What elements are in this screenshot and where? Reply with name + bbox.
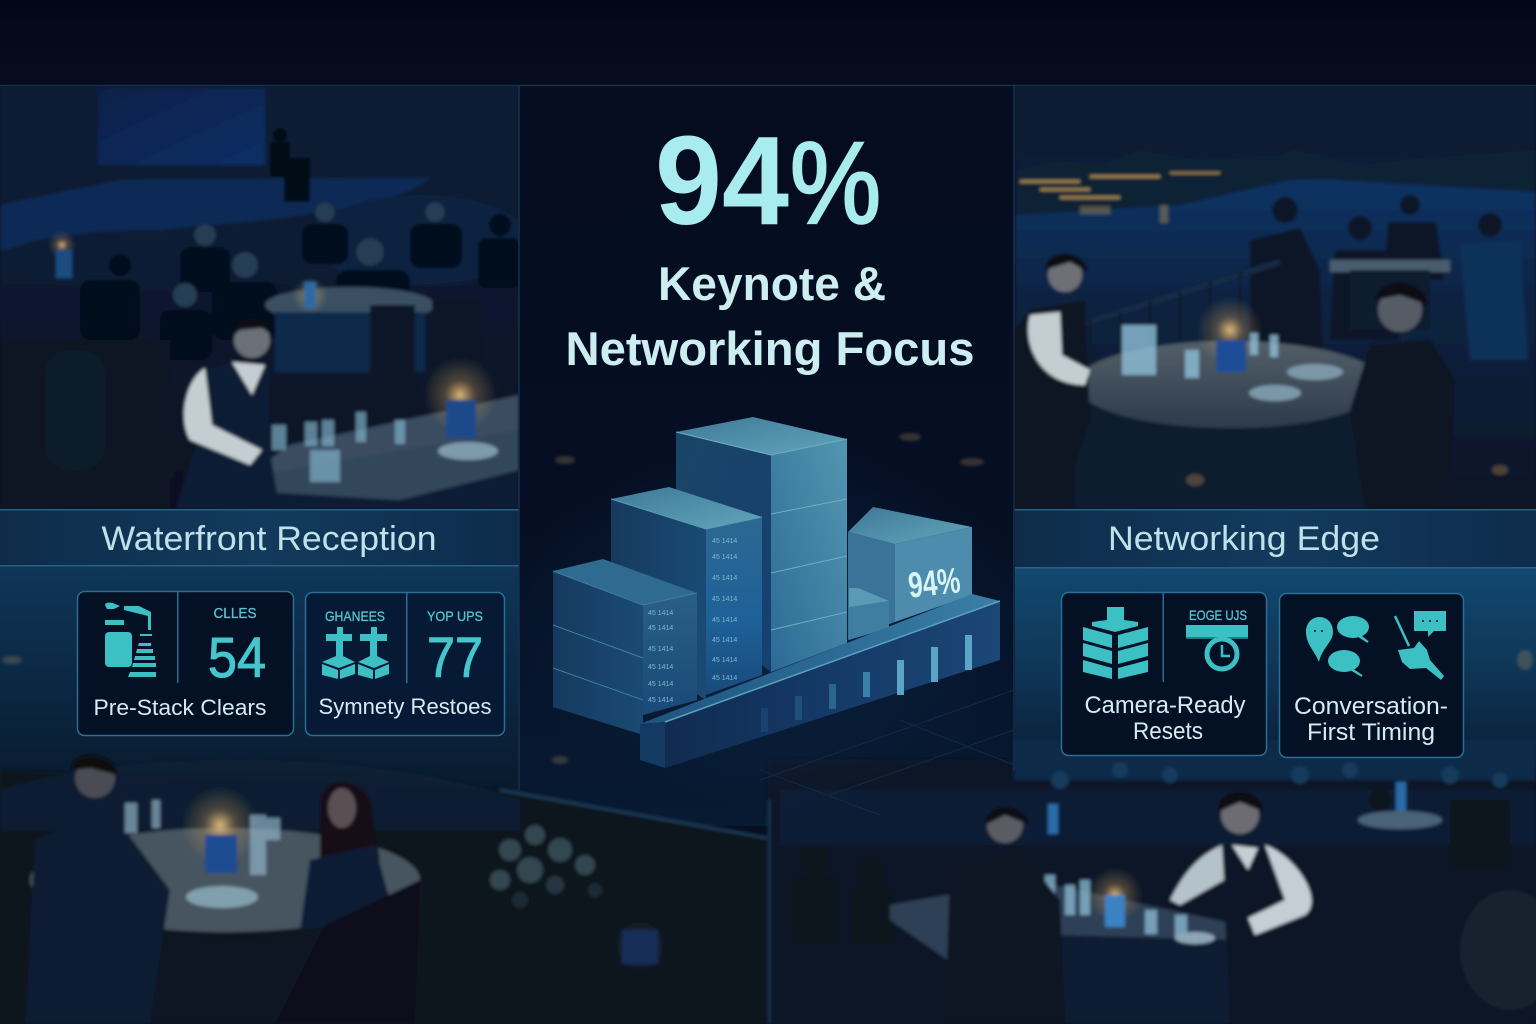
label: GHANEES: GHANEES — [325, 608, 385, 624]
woman — [300, 782, 395, 930]
value: 54: 54 — [208, 626, 266, 690]
panel: left lower band — [0, 566, 519, 791]
panel: left lower table scene — [0, 755, 768, 1024]
hero stat: 94%: 94 — [655, 110, 789, 251]
terrace rail — [500, 790, 768, 838]
caption: Symnety Restoes — [318, 694, 492, 719]
left block: 45 1414 — [648, 664, 673, 671]
right caption band — [1015, 509, 1536, 568]
middle block: 45 1414 — [712, 675, 737, 682]
railing — [1015, 262, 1280, 345]
city skyline — [1015, 150, 1536, 215]
right block — [848, 507, 972, 640]
left block: 45 1414 — [648, 646, 673, 653]
man — [25, 755, 170, 1024]
glass row — [1045, 875, 1242, 939]
left block: 45 1414 — [648, 625, 673, 632]
guest — [945, 807, 1065, 1024]
candle glow — [180, 785, 260, 865]
right chairs — [370, 305, 415, 395]
candle — [1105, 895, 1125, 927]
block label: 94%: 94% — [906, 559, 962, 606]
middle block: 45 1414 — [712, 657, 737, 664]
left dark chairs — [0, 340, 170, 510]
icon: stacked tiers — [1083, 607, 1148, 679]
caption: Pre-Stack Clears — [94, 695, 266, 720]
chair — [275, 880, 420, 1024]
hero stat: 94% — [655, 110, 881, 251]
headline — [566, 257, 974, 375]
icon: bottle and stack — [105, 603, 156, 677]
middle block: 45 1414 — [712, 617, 737, 624]
icon: rail and clock — [1186, 625, 1248, 669]
night sky — [1015, 86, 1536, 156]
stage floor — [0, 178, 430, 250]
middle block: 45 1414 — [712, 575, 737, 582]
left caption band — [0, 509, 519, 566]
left block: 45 1414 — [648, 681, 673, 688]
panel: right waterfront scene — [1015, 86, 1536, 510]
bokeh lights — [2, 433, 1533, 764]
card: Conversation-First Timing — [1280, 594, 1464, 758]
caption: Conversation- — [1294, 693, 1448, 720]
foreground table — [1075, 341, 1385, 429]
left block: 45 1414 — [648, 610, 673, 617]
bokeh right — [1186, 465, 1508, 486]
candle glow — [1087, 867, 1143, 923]
crowd — [780, 790, 1536, 845]
panel: left keynote scene — [0, 86, 530, 510]
top strip — [0, 0, 1536, 86]
candle — [1216, 340, 1246, 372]
glow haze — [510, 430, 1030, 810]
right guest — [1350, 283, 1455, 510]
table candle small — [1048, 804, 1058, 834]
waiter — [175, 319, 280, 510]
left block — [553, 559, 697, 735]
floor tiles — [760, 690, 1014, 815]
middle block — [611, 487, 762, 700]
value: 77: 77 — [427, 626, 483, 690]
candle — [446, 400, 476, 438]
platform — [640, 594, 1000, 768]
keynote speaker — [270, 128, 310, 202]
plate — [186, 886, 258, 908]
panel: right lower band — [1015, 568, 1536, 768]
table mid — [265, 287, 435, 323]
shrub — [490, 825, 602, 908]
caption: Camera-Ready — [1084, 692, 1246, 719]
icon: paired pedestals — [322, 627, 389, 679]
city lights — [1020, 172, 1220, 223]
bar table — [890, 880, 1240, 1024]
plate — [438, 442, 498, 460]
table — [30, 828, 420, 932]
hero stat: 94%: % — [790, 118, 881, 248]
glass stacks — [1122, 325, 1278, 378]
headline: Keynote & — [658, 257, 886, 310]
table with glassware — [230, 395, 519, 510]
card: Symnety Restoes — [306, 592, 504, 736]
card: Pre-Stack Clears — [78, 591, 294, 736]
heading: Waterfront Reception: Waterfront Reception — [102, 520, 436, 558]
panel: center stat column — [519, 86, 1014, 826]
audience crowd — [0, 195, 530, 360]
plates — [1287, 364, 1343, 380]
middle block: 45 1414 — [712, 554, 737, 561]
waiter right — [1015, 254, 1090, 510]
center panel frame lines — [0, 86, 1536, 790]
candle — [205, 835, 237, 873]
middle block: 45 1414 — [712, 596, 737, 603]
waiter — [1170, 792, 1311, 1024]
middle block: 45 1414 — [712, 538, 737, 545]
panel: right lower bar scene — [768, 740, 1536, 1024]
river — [1015, 180, 1536, 290]
tall block — [676, 417, 847, 672]
label: CLLES: CLLES — [214, 605, 256, 622]
right shrub — [1460, 890, 1536, 1010]
chart: isometric stacked blocks — [510, 417, 1030, 815]
icon: hand and chat — [1395, 611, 1446, 680]
heading: Networking Edge: Networking Edge — [1108, 520, 1380, 558]
small block — [849, 588, 889, 640]
heads highlights — [173, 202, 445, 307]
stage screen — [98, 88, 265, 165]
label: EOGE UJS: EOGE UJS — [1189, 607, 1247, 623]
left block: 45 1414 — [648, 697, 673, 704]
far figures — [1250, 195, 1528, 440]
candle glow — [422, 357, 498, 433]
card: Conversation-First Timing: First Timing — [1307, 719, 1435, 746]
candle glow — [1196, 296, 1264, 364]
card: Camera-Ready Resets: Resets — [1133, 718, 1203, 745]
glasses — [272, 412, 405, 482]
label: YOP UPS: YOP UPS — [427, 608, 483, 624]
headline: Networking Focus — [566, 322, 974, 375]
platform bars — [761, 635, 972, 732]
far candle — [612, 917, 668, 973]
glasses — [125, 800, 280, 875]
card: Camera-Ready Resets — [1062, 592, 1266, 756]
icon: speech bubbles — [1306, 616, 1369, 676]
middle block: 45 1414 — [712, 637, 737, 644]
